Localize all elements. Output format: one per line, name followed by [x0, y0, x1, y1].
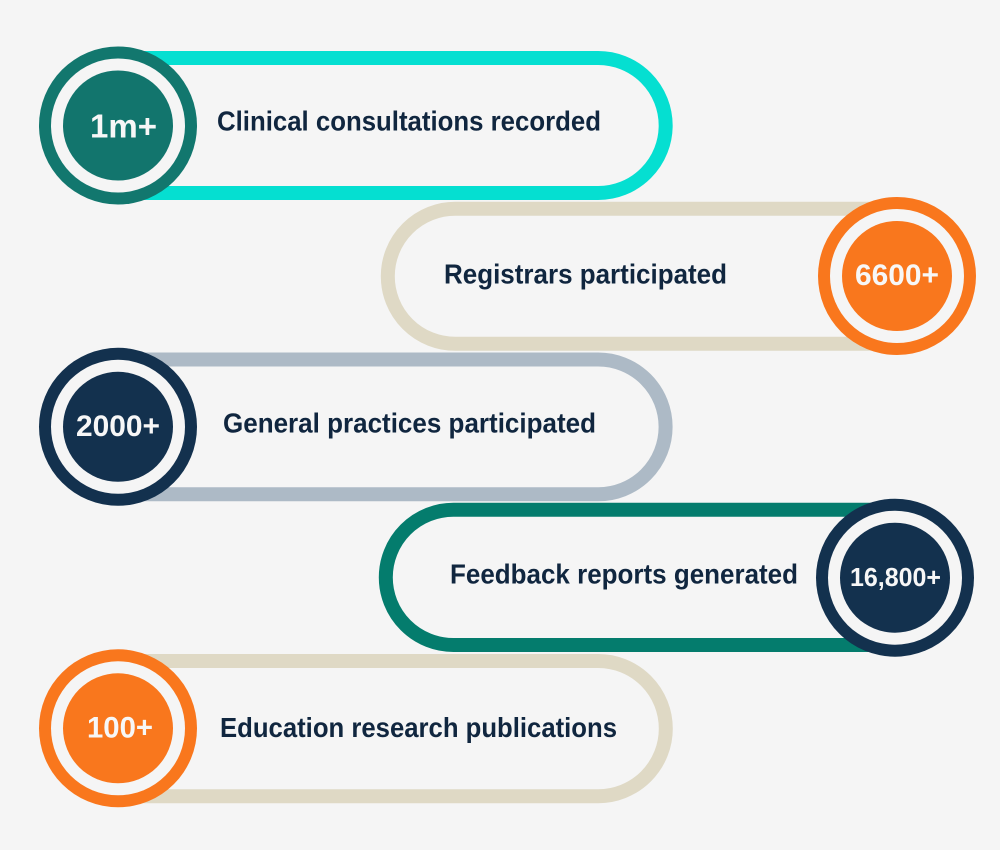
row 2: registrars	[388, 197, 976, 355]
badge: 100+	[39, 649, 197, 807]
pill outline: beige	[388, 209, 897, 344]
row 5: education research	[39, 649, 666, 807]
label: General practices participated	[223, 408, 596, 439]
pill outline: teal	[118, 58, 666, 193]
badge: 1m+	[39, 46, 197, 204]
pill outline: grey blue	[118, 360, 666, 494]
badge: 6600+	[818, 197, 976, 355]
badge: 2000+: 2000+	[76, 410, 160, 443]
label: Education research publications	[220, 712, 617, 743]
badge: 6600+: 6600+	[855, 259, 939, 292]
label: Clinical consultations recorded	[217, 106, 601, 136]
badge: 2000+	[39, 348, 197, 506]
badge: 16,800+	[816, 499, 974, 657]
row 4: feedback reports	[386, 499, 974, 657]
badge: 100+: 100+	[87, 711, 153, 744]
row 3: general practices	[39, 348, 666, 506]
badge: 1m+: 1m+	[90, 108, 157, 145]
pill outline: dark teal	[386, 510, 895, 645]
row 1: clinical consultations	[39, 46, 666, 204]
label: Feedback reports generated	[450, 558, 798, 589]
label: Registrars participated	[444, 258, 727, 290]
badge: 16,800+: 16,800+	[850, 564, 941, 592]
pill outline: beige	[118, 661, 666, 796]
